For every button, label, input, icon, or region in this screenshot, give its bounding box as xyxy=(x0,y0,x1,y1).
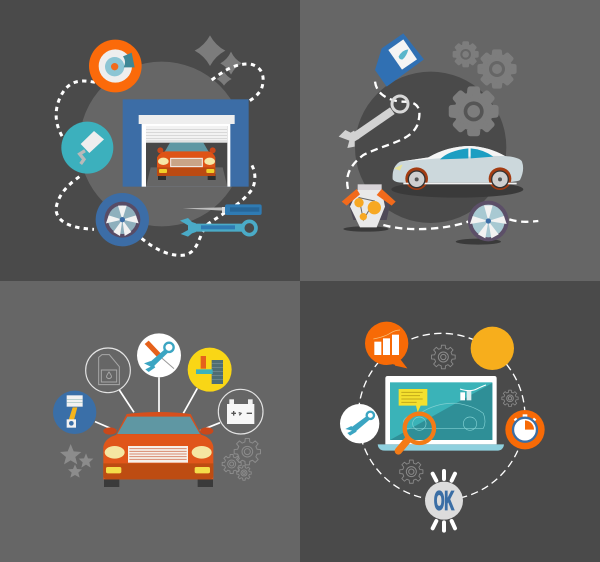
icon: engine xyxy=(342,184,396,232)
icon: tools xyxy=(137,333,181,377)
icon: OK badge xyxy=(425,471,463,531)
icon: battery xyxy=(218,389,263,434)
icon: car in garage xyxy=(157,143,216,180)
icon: wheel xyxy=(96,193,149,246)
icon: wheel shadow xyxy=(456,239,501,245)
icon: magnifier xyxy=(398,414,434,451)
icon: wrench xyxy=(180,218,256,237)
icon: sparkle stars xyxy=(195,35,242,86)
backdrop circle xyxy=(79,62,244,226)
icon: wrench xyxy=(339,96,408,148)
panel: diagnostics xyxy=(340,322,545,531)
icon: outline gears xyxy=(222,438,260,480)
panel: garage xyxy=(56,35,263,255)
icon: laptop xyxy=(378,376,504,451)
dashed route xyxy=(347,82,538,229)
icon: exhaust muffler xyxy=(61,122,113,174)
icon: wheel xyxy=(468,201,509,241)
icon: screwdriver xyxy=(183,204,262,215)
car shadow xyxy=(391,181,523,198)
panel: car parts xyxy=(53,333,263,487)
icon: brake disc xyxy=(89,40,142,92)
icon: shock absorber tyre xyxy=(188,348,232,392)
icon: OK badge: OK xyxy=(434,486,454,516)
connector lines xyxy=(95,377,220,431)
icon: gears xyxy=(452,43,514,133)
icon: oil canister outline xyxy=(86,348,130,393)
icon: oil can xyxy=(375,33,424,87)
dashed route xyxy=(56,64,263,255)
icon: piston xyxy=(53,391,96,434)
backdrop circle xyxy=(355,72,506,223)
icon: white sedan xyxy=(393,146,523,190)
icon: chart bubble xyxy=(365,322,408,368)
speech note xyxy=(399,389,427,412)
icon: outline gears xyxy=(400,345,518,483)
panel: car service xyxy=(339,33,538,245)
icon: wrench circle xyxy=(340,404,379,443)
icon: stopwatch xyxy=(505,410,545,449)
dashed ring xyxy=(358,333,525,500)
icon: stars xyxy=(60,444,93,478)
garage building xyxy=(123,99,249,187)
amber circle xyxy=(471,327,514,370)
icon: red car front xyxy=(103,412,213,487)
